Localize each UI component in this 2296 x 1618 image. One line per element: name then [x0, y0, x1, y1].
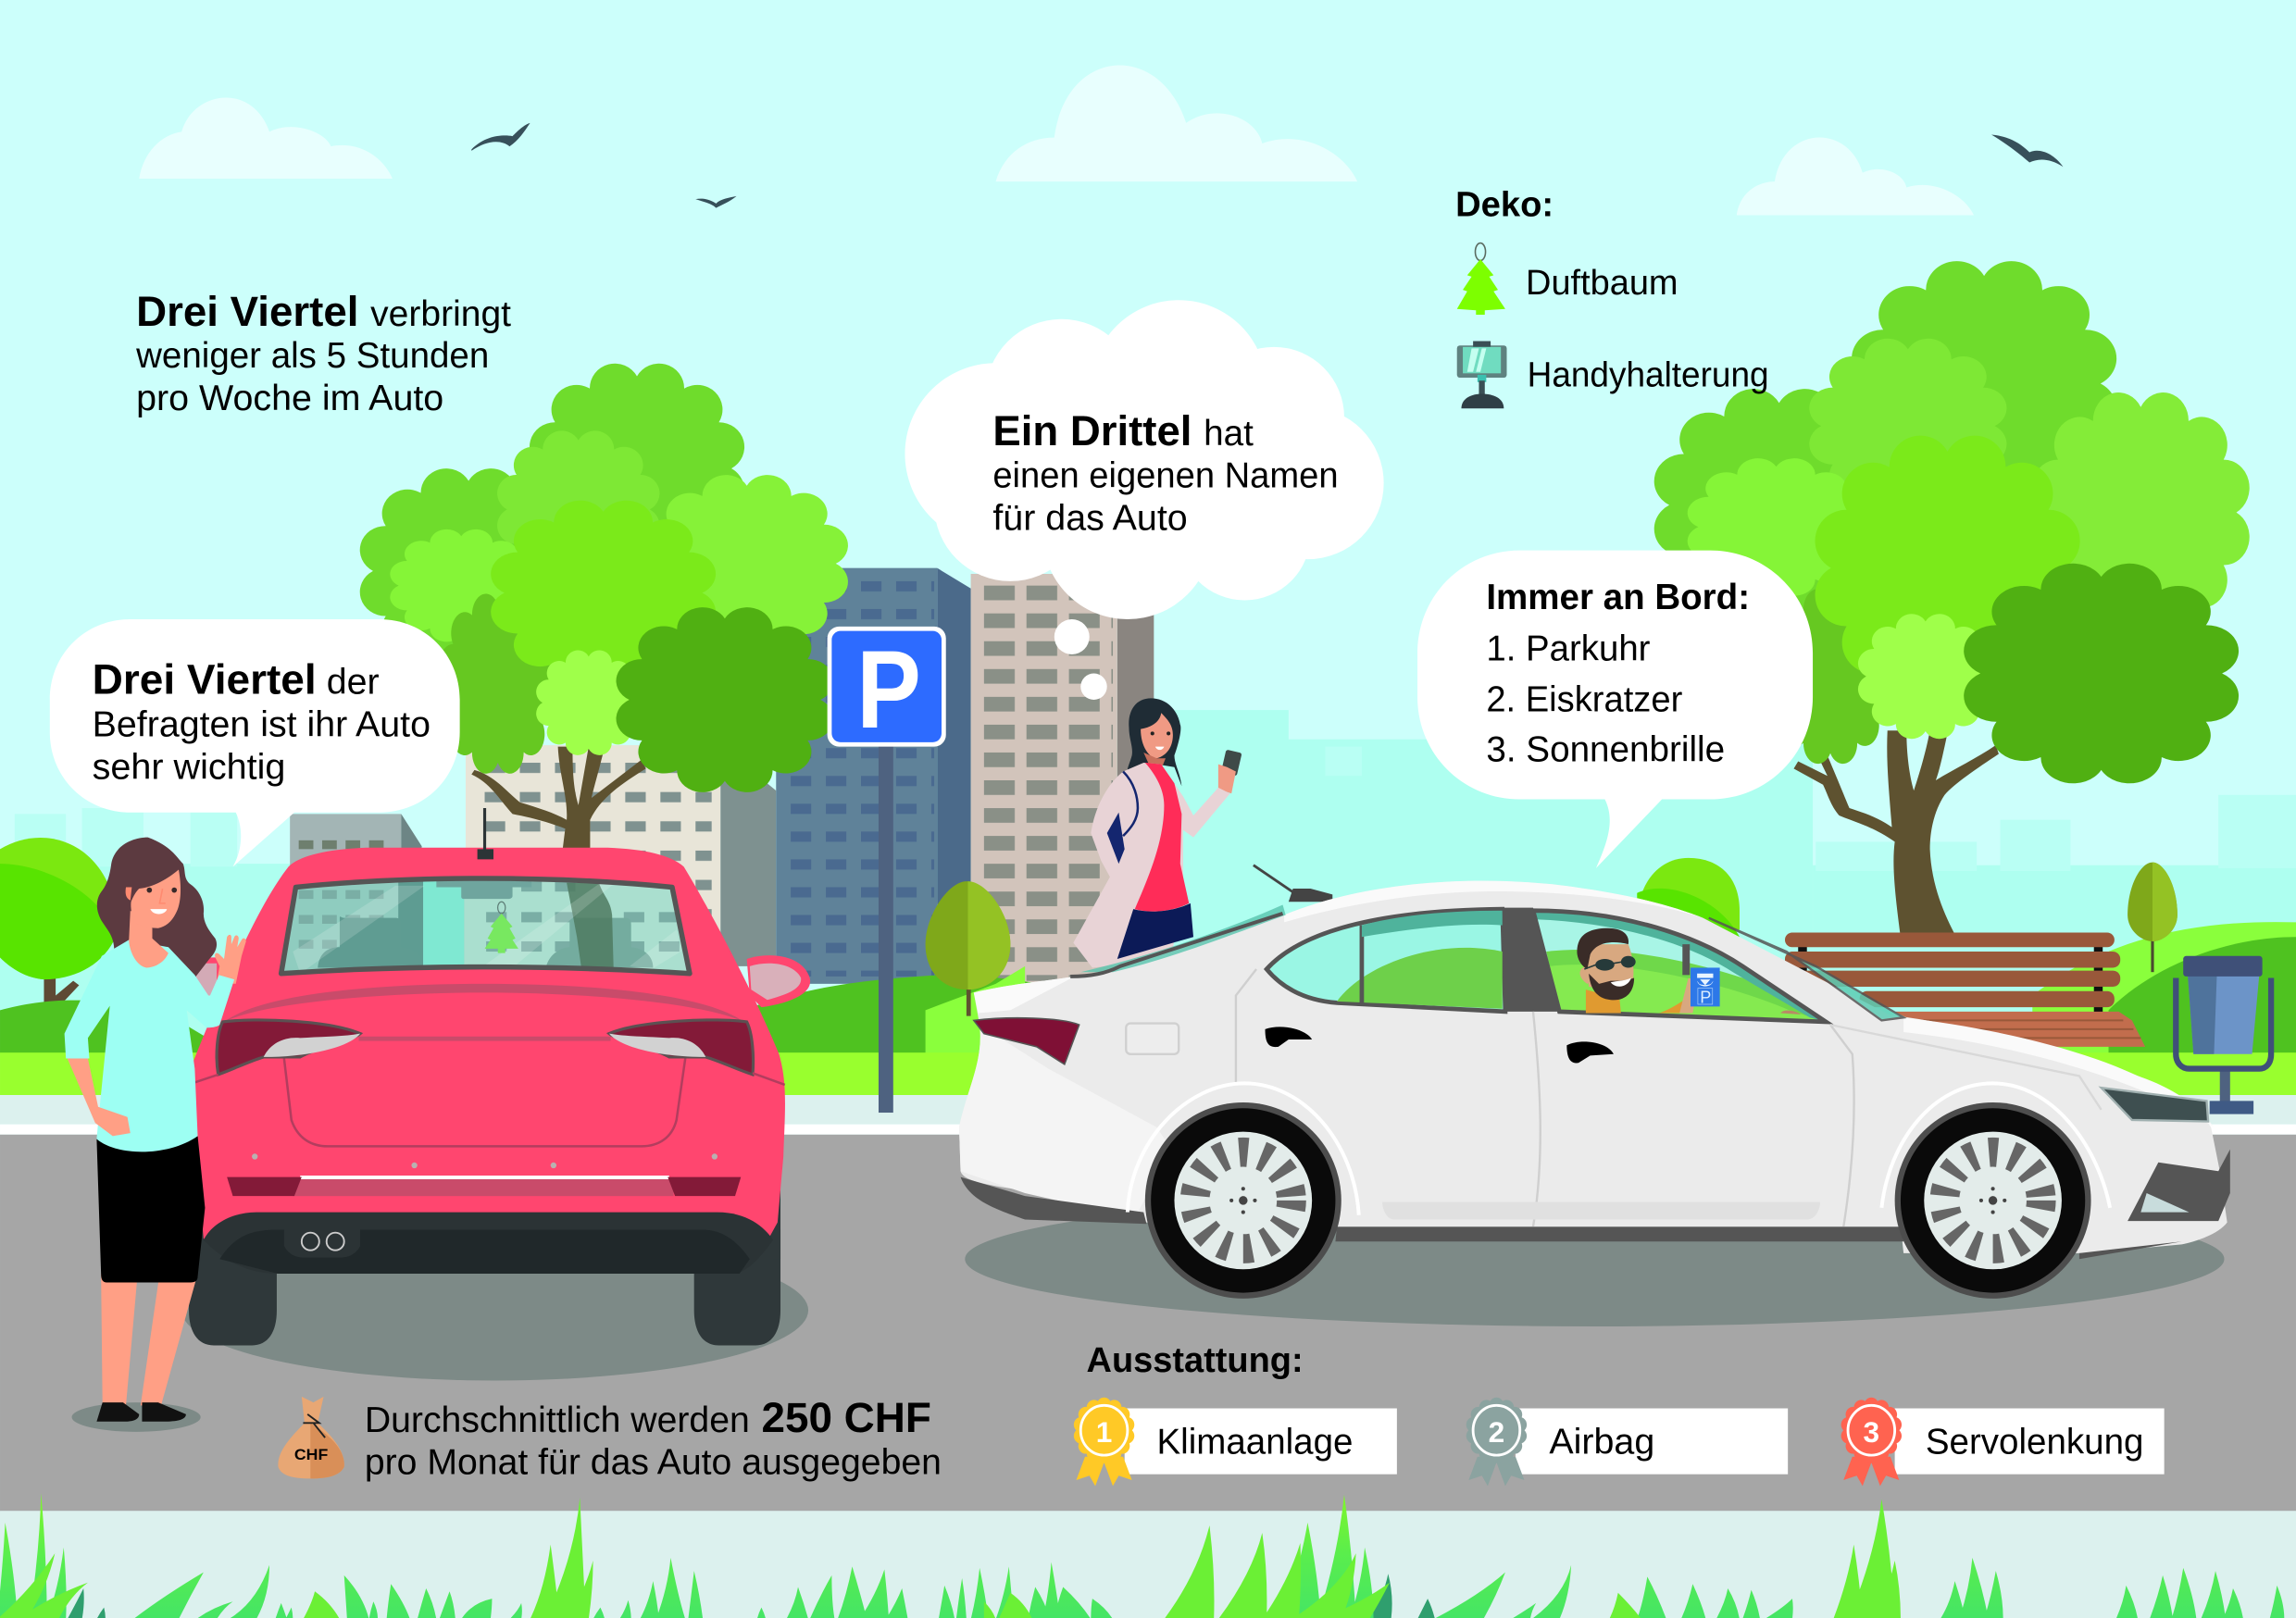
- spoiler line: [224, 984, 743, 1022]
- text: monthly spend: [365, 1393, 942, 1483]
- cream building: [466, 745, 776, 966]
- gray small building: [290, 814, 422, 937]
- right tail light: [609, 1020, 754, 1075]
- medal 1: 1: [1096, 1415, 1112, 1449]
- front grill: [2128, 1150, 2230, 1221]
- ear: [126, 887, 131, 901]
- icon: money bag: CHF: [294, 1446, 328, 1463]
- coat: [1073, 763, 1230, 967]
- raised hand: [215, 935, 246, 984]
- front wheel: [1895, 1102, 2091, 1299]
- text: hours per week: weniger als 5 Stunden: [135, 336, 489, 376]
- shoes: [96, 1402, 186, 1422]
- speech bubble text: Befragten ist ihr Auto: [93, 705, 430, 745]
- reflector strip: [227, 1153, 741, 1196]
- green hills: [0, 922, 2296, 1054]
- ausstattung heading: Ausstattung:: [1087, 1341, 1304, 1380]
- body: [959, 881, 2227, 1253]
- equipment rank 2: Airbag: [1549, 1423, 1654, 1462]
- thought text: Ein Drittel: [992, 406, 1192, 454]
- wheel arches: [1128, 1083, 2110, 1215]
- thought bubble: [905, 300, 1384, 700]
- medal 3: [1841, 1398, 1902, 1486]
- text: monthly spend: Durchschnittlich werden: [365, 1400, 750, 1440]
- exhaust: [284, 1230, 360, 1258]
- face: [1141, 713, 1173, 758]
- always on board list: [1486, 578, 1750, 769]
- body: [190, 848, 785, 1251]
- always on board list: 1. Parkuhr: [1486, 629, 1651, 668]
- bumper: [204, 1213, 773, 1274]
- sidewalk: [0, 1095, 2296, 1125]
- red car: [189, 808, 810, 1346]
- road edge: [0, 1125, 2296, 1135]
- grass strip: [0, 1052, 2296, 1095]
- trash bin: [2176, 956, 2271, 1114]
- medal 3: 3: [1864, 1415, 1879, 1449]
- hair: [97, 838, 217, 978]
- birds: [471, 123, 2064, 208]
- rear wheel: [1145, 1102, 1341, 1299]
- mirror stem: [1682, 944, 1690, 975]
- deko heading: Deko:: [1455, 185, 1554, 224]
- equipment rank 3: Servolenkung: [1926, 1423, 2143, 1462]
- hand with phone: [1218, 750, 1242, 793]
- neck: [1143, 753, 1166, 765]
- tree foliage: [1654, 261, 2250, 783]
- standing woman: [1073, 698, 1242, 967]
- left big tree: [360, 364, 848, 852]
- left tail light: [217, 1020, 360, 1075]
- pillar: [1503, 908, 1559, 1012]
- thought text: hat: [1204, 414, 1254, 454]
- clouds: [139, 66, 1974, 215]
- shadow under red car: [181, 1240, 808, 1380]
- equipment rank 1: Klimaanlage: [1156, 1423, 1353, 1462]
- parking sign: [828, 627, 946, 1113]
- windshield: [1709, 918, 1903, 1020]
- sill panel: [1382, 1202, 1820, 1219]
- neck: [129, 911, 168, 967]
- door handles: [1266, 1027, 1312, 1047]
- tree foliage: [360, 364, 848, 792]
- woman with raised hand: [65, 838, 246, 1422]
- text: monthly spend: pro Monat für das Auto ausgegeben: [365, 1443, 942, 1483]
- medal 1: [1074, 1398, 1134, 1486]
- side window rear: [1267, 909, 1505, 1012]
- skirt: [96, 1136, 205, 1282]
- speech bubble text: der: [327, 663, 380, 703]
- face: [131, 869, 181, 928]
- navy trousers: [1117, 903, 1193, 959]
- icon: air freshener: [1457, 243, 1505, 315]
- fuel cap: [1126, 1024, 1179, 1054]
- rear glass: [1070, 904, 1286, 977]
- always on board list: Immer an Bord:: [1486, 578, 1750, 617]
- parking disc: P: [1700, 988, 1711, 1006]
- always on board list: 3. Sonnenbrille: [1486, 729, 1725, 769]
- grass foreground: [0, 1493, 2284, 1618]
- tires: [189, 1230, 277, 1346]
- tree trunk: [471, 747, 646, 852]
- text: hours per week: [135, 287, 511, 418]
- headlight: [2102, 1088, 2208, 1122]
- thought text: für das Auto: [992, 499, 1188, 539]
- thought text: einen eigenen Namen: [992, 456, 1339, 496]
- hair: [1128, 698, 1181, 786]
- parking sign: P: [856, 628, 921, 752]
- face details: [146, 888, 177, 915]
- road: [0, 1135, 2296, 1512]
- label: Handyhalterung: Handyhalterung: [1528, 356, 1769, 395]
- small tree by road: [926, 881, 1010, 1016]
- speech bubble right: [1417, 551, 1813, 868]
- left small tree: [0, 838, 116, 1034]
- equipment rank 3: [1841, 1398, 2165, 1486]
- equipment rank 1: [1074, 1398, 1397, 1486]
- speech bubble text: [93, 655, 430, 787]
- label: Duftbaum: Duftbaum: [1526, 264, 1678, 303]
- red shirt: [1135, 763, 1189, 912]
- speech bubble text: Drei Viertel: [93, 655, 317, 703]
- always on board list: 2. Eiskratzer: [1486, 680, 1682, 720]
- blue building: [776, 568, 971, 984]
- text: hours per week: Drei Viertel: [136, 287, 359, 335]
- tail light: [974, 1018, 1079, 1064]
- white car: [959, 865, 2230, 1299]
- medal 2: 2: [1489, 1415, 1504, 1449]
- backpack: [1107, 772, 1138, 864]
- steering hand: [1780, 1011, 1801, 1014]
- antenna: [1254, 865, 1332, 902]
- tree trunk: [1793, 726, 1999, 937]
- rear highlight: [959, 1025, 1171, 1218]
- roof and hood highlights: [974, 881, 2214, 1127]
- blouse: [65, 940, 234, 1151]
- mirrors: [194, 955, 810, 1007]
- text: monthly spend: 250 CHF: [761, 1393, 931, 1441]
- rear window: [281, 878, 690, 974]
- bush behind white car: [1637, 858, 1740, 937]
- trunk outline: [284, 1059, 685, 1146]
- shadow under woman: [72, 1402, 201, 1432]
- bottom band: [0, 1511, 2296, 1618]
- city skyline silhouette: [0, 710, 2296, 1076]
- rocker: [961, 1177, 2182, 1259]
- icon: phone holder: [1457, 342, 1506, 408]
- small tree right: [2128, 863, 2177, 972]
- thought text: [992, 406, 1339, 539]
- legs: [101, 1274, 198, 1405]
- speech bubble left: [50, 619, 460, 866]
- speech bubble text: sehr wichtig: [93, 747, 285, 787]
- antenna: [478, 808, 493, 859]
- text: hours per week: pro Woche im Auto: [136, 379, 443, 418]
- text: hours per week: verbringt: [370, 294, 511, 334]
- door lines: [1236, 969, 1854, 1226]
- lower arm: [68, 1059, 131, 1136]
- right big tree: [1654, 261, 2250, 937]
- equipment rank 2: [1466, 1398, 1788, 1486]
- shadow under white car: [965, 1191, 2224, 1326]
- bench: [1785, 932, 2145, 1047]
- icon: money bag: [278, 1397, 344, 1478]
- driver: [1577, 928, 1699, 1013]
- medal 2: [1466, 1398, 1527, 1486]
- hanging air freshener: [485, 902, 518, 953]
- tan building: [971, 574, 1154, 995]
- parking disc: [1691, 967, 1720, 1006]
- side window front: [1503, 908, 1826, 1022]
